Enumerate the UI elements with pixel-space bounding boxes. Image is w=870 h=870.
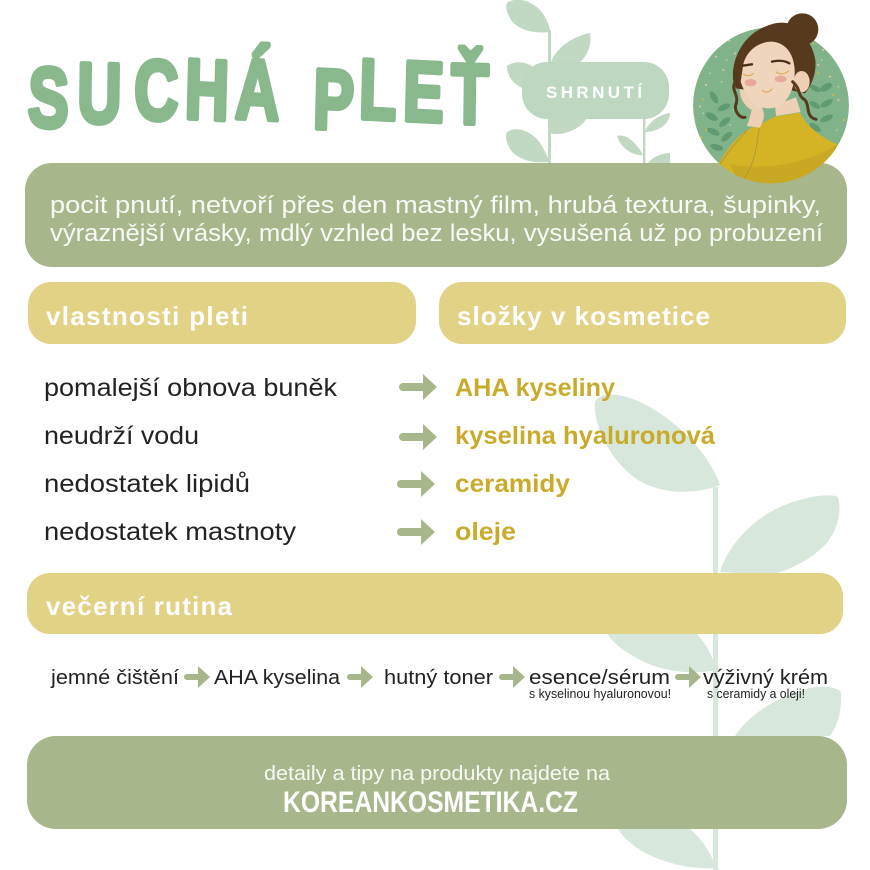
evening routine steps: esence/sérum [529, 667, 670, 689]
background plant: bottom right [595, 395, 841, 870]
header: večerní rutina [27, 573, 843, 634]
ear [794, 71, 810, 92]
header: večerní rutina: večerní rutina [46, 591, 233, 621]
evening routine steps [50, 667, 828, 701]
badge: shrnutí: SHRNUTÍ [546, 83, 643, 102]
evening routine steps: jemné čištění [50, 667, 179, 689]
list: cosmetic ingredients: AHA kyseliny [455, 374, 615, 402]
list: cosmetic ingredients: kyselina hyaluronová [455, 422, 715, 450]
list: skin properties [44, 374, 338, 546]
sweater [718, 113, 837, 187]
panel: website footer [27, 736, 847, 829]
curls [734, 82, 816, 119]
list: cosmetic ingredients: ceramidy [455, 470, 570, 498]
cheeks [745, 79, 757, 86]
arrows: list [397, 374, 437, 545]
eyebrows, eyes and mouth [743, 61, 789, 66]
list: cosmetic ingredients [455, 374, 715, 546]
list: skin properties: pomalejší obnova buněk [44, 374, 338, 402]
panel: symptoms: výraznější vrásky, mdlý vzhled bez lesku, vysušená už po probuzení [50, 220, 823, 247]
hair bun [786, 13, 818, 45]
evening routine steps: s ceramidy a oleji! [707, 687, 805, 701]
evening routine steps: výživný krém [703, 667, 828, 689]
panel: symptoms [25, 163, 847, 267]
header: složky v kosmetice: složky v kosmetice [457, 301, 710, 331]
evening routine steps: AHA kyselina [214, 667, 341, 689]
list: skin properties: nedostatek lipidů [44, 470, 250, 498]
hair mass [733, 23, 816, 93]
panel: website footer: KOREANKOSMETIKA.CZ [283, 786, 578, 819]
list: cosmetic ingredients: oleje [455, 518, 516, 546]
background plant: top [506, 0, 670, 163]
badge: shrnutí [522, 62, 669, 119]
portrait illustration [693, 13, 849, 187]
portrait background circle [693, 27, 849, 187]
list: skin properties: nedostatek mastnoty [44, 518, 297, 546]
arrows: routine [184, 666, 701, 688]
evening routine steps: hutný toner [384, 667, 493, 689]
neck and hand [740, 87, 801, 128]
panel: website footer: detaily a tipy na produkty najdete na [264, 763, 611, 785]
face [741, 42, 795, 108]
panel: symptoms: pocit pnutí, netvoří přes den mastný film, hrubá textura, šupinky, [50, 192, 821, 219]
header: vlastnosti pleti [28, 282, 416, 344]
title: SUCHÁ PLEŤ [27, 41, 489, 148]
header: složky v kosmetice [439, 282, 846, 344]
header: vlastnosti pleti: vlastnosti pleti [46, 301, 248, 331]
evening routine steps: s kyselinou hyaluronovou! [529, 687, 671, 701]
list: skin properties: neudrží vodu [44, 422, 199, 450]
